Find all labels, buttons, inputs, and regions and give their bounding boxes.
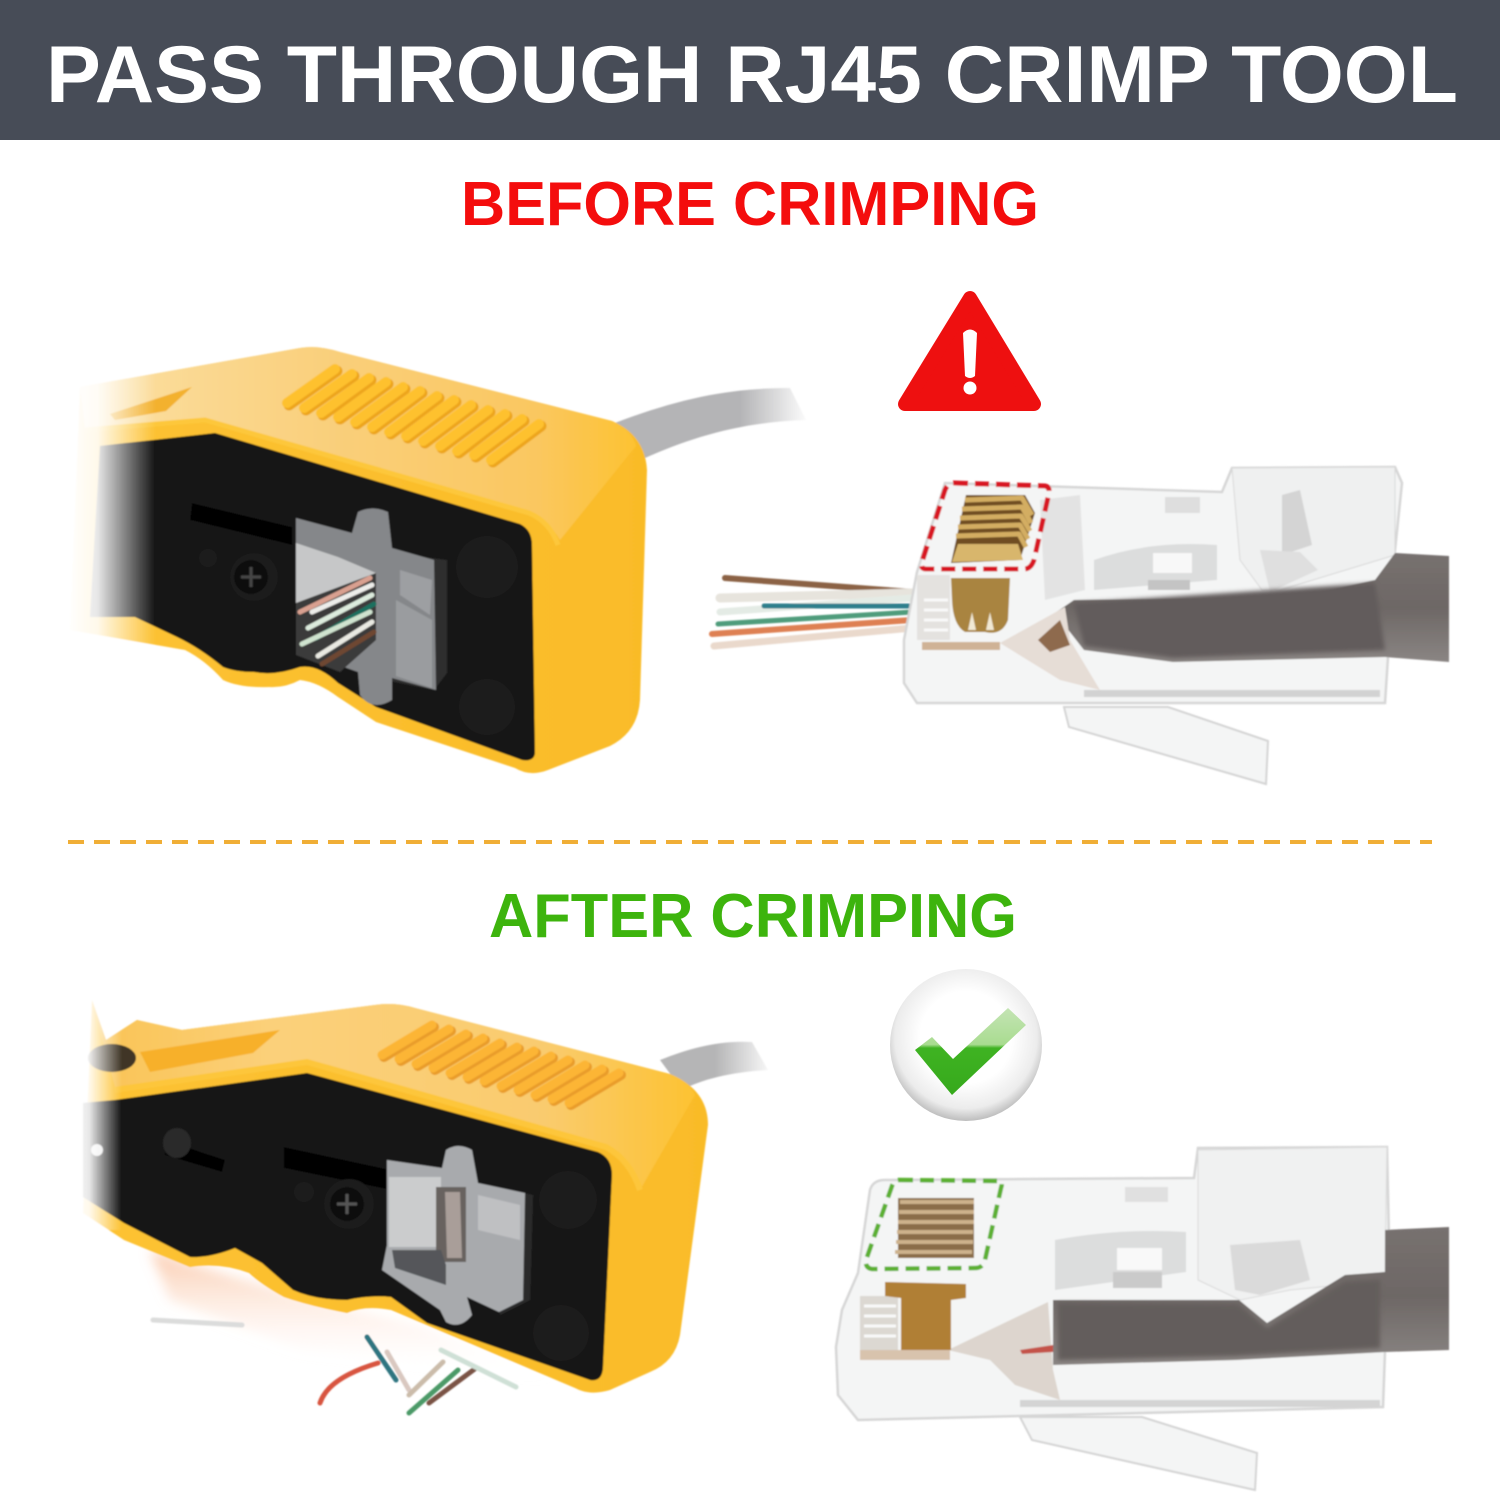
black face plate <box>90 433 535 760</box>
wires <box>712 578 912 646</box>
divider <box>68 840 1432 844</box>
title banner <box>0 0 1500 140</box>
lower gold pad <box>885 1282 966 1350</box>
green dashed highlight <box>866 1180 1002 1269</box>
handle slot <box>110 387 192 420</box>
latch <box>1020 1417 1257 1490</box>
latch <box>1064 707 1268 784</box>
cable <box>1055 553 1449 662</box>
gold contacts <box>951 495 1035 563</box>
RJ45 connector before crimping <box>712 467 1449 784</box>
crimp die <box>296 508 447 705</box>
glass details <box>1094 544 1217 590</box>
heading: after crimping: AFTER CRIMPING <box>489 882 1017 951</box>
screw <box>324 1179 374 1229</box>
rim highlight <box>115 1062 640 1190</box>
red dashed highlight <box>922 483 1049 569</box>
grip ridges <box>382 1025 621 1105</box>
front face ribs <box>917 575 950 640</box>
gold contacts <box>895 1198 974 1258</box>
crimp tool after crimping <box>72 990 775 1413</box>
rim highlight <box>85 420 558 545</box>
title banner: PASS THROUGH RJ45 CRIMP TOOL <box>46 30 1458 120</box>
rubber bumps <box>456 536 518 735</box>
rubber bumps <box>533 1171 597 1361</box>
cut wire scraps <box>153 1320 516 1413</box>
cable <box>1053 1227 1449 1365</box>
spring <box>88 1044 136 1072</box>
glass details <box>1055 1231 1186 1290</box>
sliding lock button <box>91 1128 225 1172</box>
floor reflection <box>150 1250 560 1380</box>
heading: before crimping: BEFORE CRIMPING <box>461 170 1039 239</box>
plug body <box>904 467 1402 703</box>
screw <box>230 553 278 601</box>
wedge at cable entry <box>948 1302 1060 1400</box>
cut wire bundle <box>300 578 374 664</box>
crimp die <box>382 1146 533 1325</box>
plug body <box>836 1147 1389 1420</box>
lower gold pad <box>951 578 1010 633</box>
warning triangle icon <box>905 298 1034 404</box>
wedge at cable entry <box>1000 607 1100 690</box>
grip ridges <box>287 369 541 462</box>
front ribs <box>860 1296 898 1350</box>
check mark icon <box>890 969 1042 1121</box>
handle slot <box>140 1030 280 1072</box>
black face plate <box>83 1073 612 1380</box>
RJ45 connector after crimping <box>836 1147 1449 1490</box>
crimp tool before crimping <box>66 340 810 773</box>
